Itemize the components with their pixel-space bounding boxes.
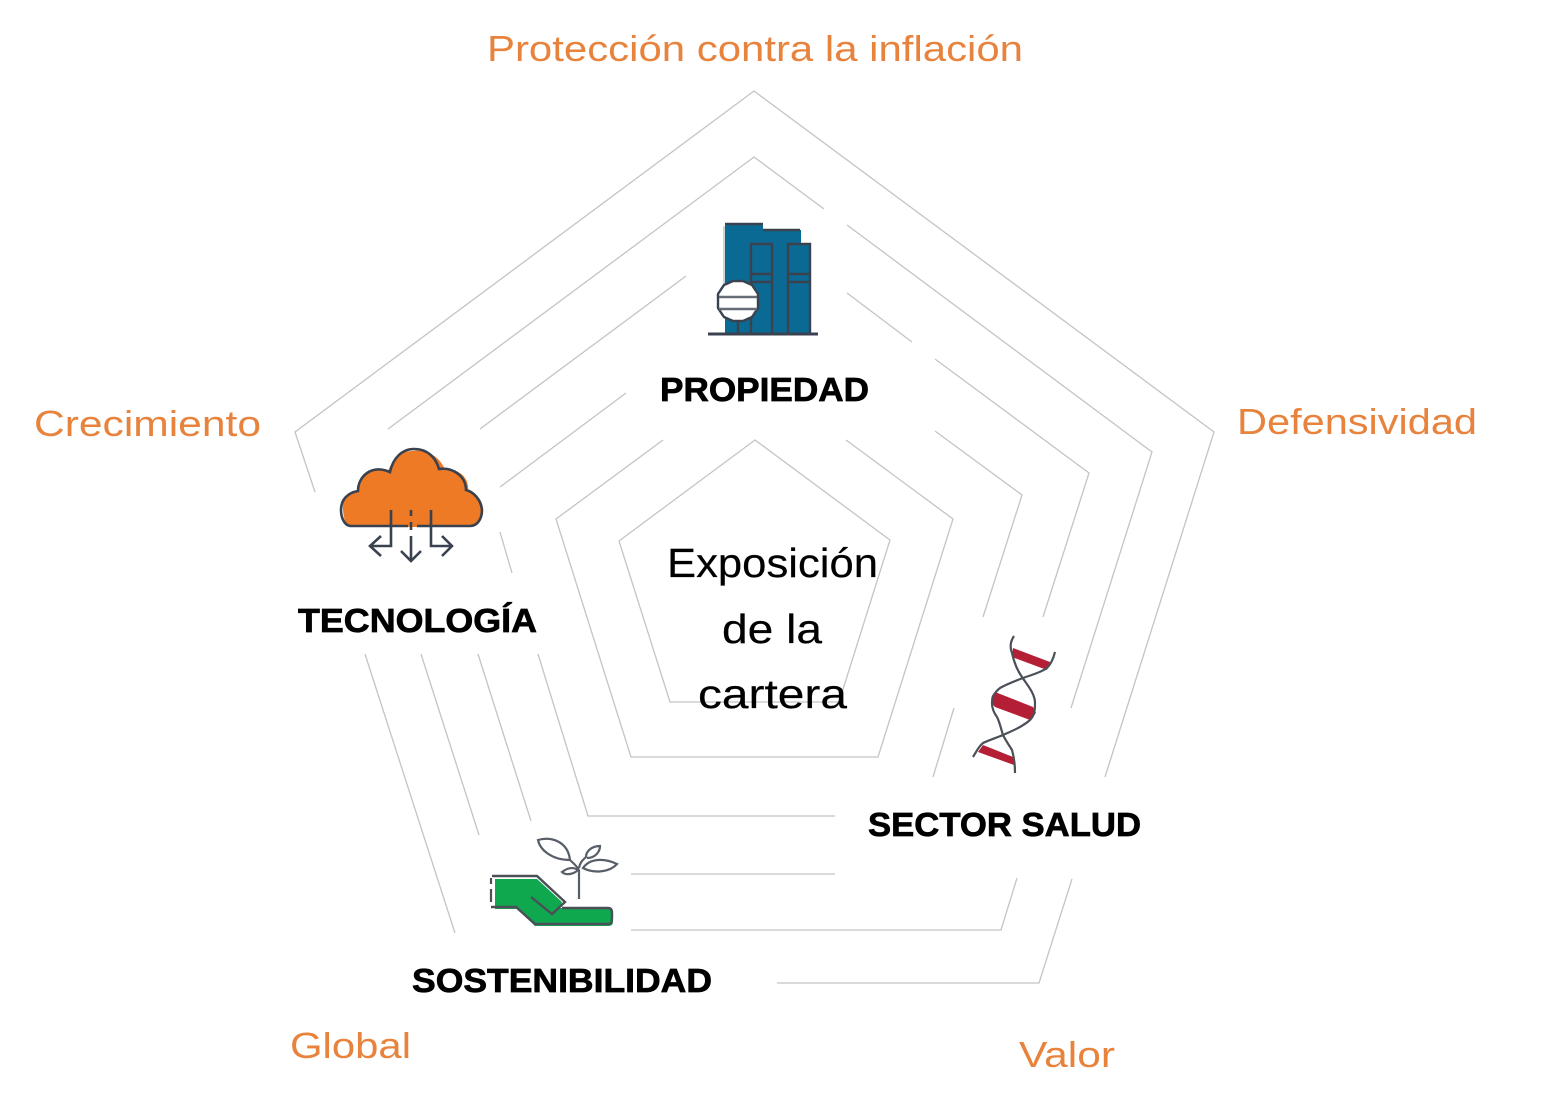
icon: hand holding plant [491, 839, 617, 926]
pentagon radar grid [295, 91, 1214, 983]
center text: Exposición de la cartera [667, 540, 878, 717]
axis label: Valor: Valor [1019, 1034, 1115, 1075]
center text: Exposición de la cartera: cartera [698, 671, 847, 717]
icon: DNA helix [973, 636, 1055, 773]
icon: buildings [708, 224, 818, 334]
label: SECTOR SALUD: SECTOR SALUD [868, 806, 1141, 843]
axis label: Defensividad: Defensividad [1237, 401, 1477, 442]
center text: Exposición de la cartera: de la [722, 606, 822, 652]
label: TECNOLOGÍA: TECNOLOGÍA [298, 602, 537, 639]
label: SOSTENIBILIDAD: SOSTENIBILIDAD [412, 962, 712, 999]
axis label: Protección contra la inflación: Protección contra la inflación [487, 28, 1023, 69]
axis label: Crecimiento: Crecimiento [34, 403, 261, 444]
axis label: Global: Global [290, 1025, 411, 1066]
center text: Exposición de la cartera: Exposición [667, 540, 878, 586]
label: PROPIEDAD: PROPIEDAD [660, 371, 869, 408]
icon: cloud with arrows [341, 449, 483, 561]
